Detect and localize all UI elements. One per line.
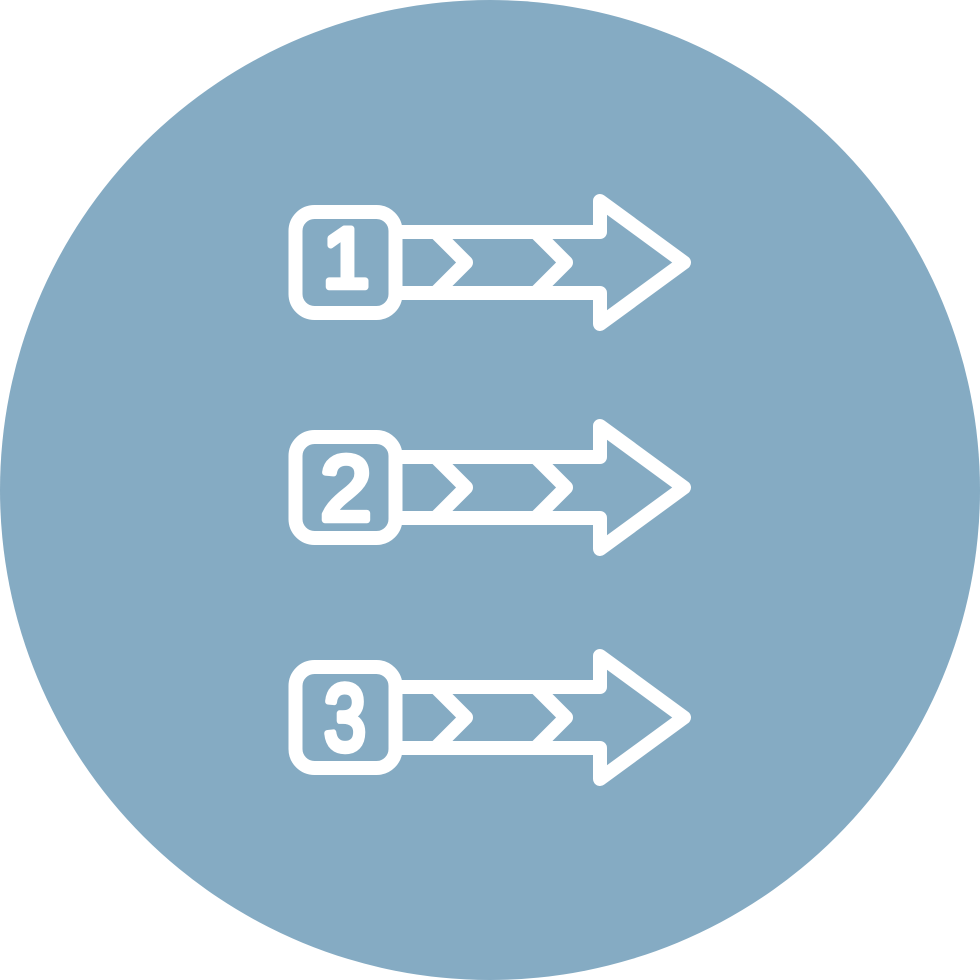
number box 1 bbox=[296, 212, 396, 313]
number 1: 1 bbox=[323, 211, 369, 305]
arrow 2 bbox=[396, 426, 684, 549]
arrow 3 bbox=[396, 656, 684, 779]
arrow 2 chevrons bbox=[436, 457, 566, 518]
arrow 1 bbox=[396, 201, 684, 324]
arrow 3 chevrons bbox=[436, 687, 566, 748]
number 2: 2 bbox=[320, 438, 372, 540]
step 2 bbox=[296, 426, 684, 549]
number box 2 bbox=[296, 437, 396, 538]
step 3 bbox=[296, 656, 684, 779]
number 3: 3 bbox=[324, 665, 366, 770]
step 1 bbox=[296, 201, 684, 324]
arrow 1 chevrons bbox=[436, 232, 566, 293]
number box 3 bbox=[296, 667, 396, 768]
